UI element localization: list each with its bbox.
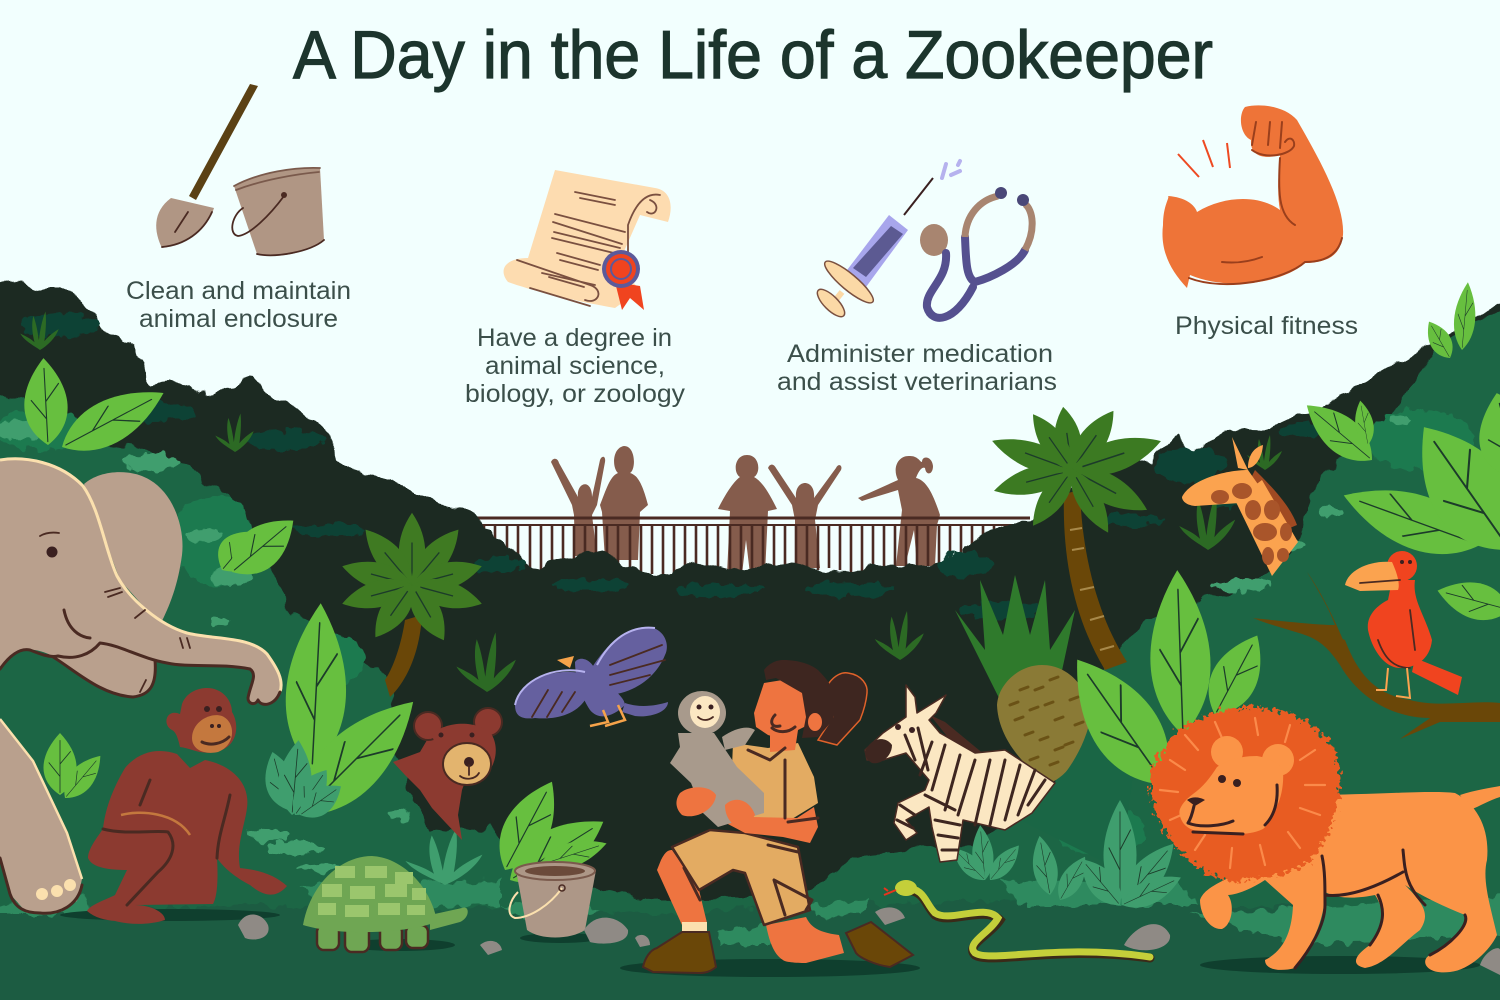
parrot body	[1368, 580, 1432, 668]
parrot	[1345, 551, 1462, 698]
lion face	[1187, 775, 1277, 834]
orangutan head	[166, 688, 236, 753]
dark foliage patches	[20, 313, 1322, 619]
lion body lines	[1295, 850, 1466, 968]
visitor: child waving	[551, 457, 605, 556]
bird legs	[590, 705, 625, 726]
giraffe neck	[1235, 480, 1298, 576]
purple bird	[515, 627, 668, 726]
plant: spiky right behind pod	[955, 575, 1075, 700]
caption: medication	[777, 340, 1057, 396]
hill overlap near pod	[1020, 712, 1135, 870]
lion ears	[1211, 736, 1294, 776]
bridge railing	[475, 518, 1030, 576]
zookeeper with sloth	[643, 660, 913, 973]
bear body	[393, 735, 480, 840]
caption: clean	[126, 277, 351, 333]
zebra stripes	[897, 728, 1045, 850]
icon: flexed arm	[1162, 105, 1343, 288]
sloth face	[678, 691, 726, 735]
ground	[0, 900, 1500, 1000]
parrot beak	[1345, 562, 1399, 591]
snake	[884, 880, 1150, 958]
elephant leg	[0, 719, 82, 913]
lion	[1150, 707, 1500, 972]
plants: teal right	[947, 800, 1186, 916]
zebra mane	[930, 715, 985, 765]
bear	[393, 708, 502, 840]
icon: diploma scroll	[504, 170, 671, 310]
parrot tail	[1412, 658, 1462, 695]
keeper ear	[808, 713, 822, 731]
bear ears	[414, 708, 502, 740]
rocks	[238, 907, 1500, 975]
giraffe	[1182, 437, 1298, 576]
seed pod	[997, 665, 1092, 783]
zebra muzzle	[865, 739, 892, 763]
parrot head	[1387, 551, 1417, 581]
leaves: top right	[1295, 281, 1500, 627]
lion mane strokes	[1160, 718, 1325, 868]
title: A Day in the Life of a Zookeeper	[293, 17, 1213, 93]
tortoise shell plates	[318, 866, 426, 917]
elephant contours	[0, 459, 281, 704]
visitor: child waving 2	[768, 465, 841, 568]
orangutan	[87, 688, 287, 924]
keeper shorts	[672, 830, 810, 925]
keeper forearm	[722, 800, 818, 843]
ground patches	[0, 880, 1500, 945]
orangutan muzzle	[192, 715, 232, 753]
elephant head and trunk	[0, 459, 281, 704]
palm tree: right	[988, 403, 1166, 670]
bird feather lines	[532, 645, 665, 717]
parrot legs and lines	[1360, 560, 1415, 698]
keeper neck	[770, 730, 798, 752]
bird highlights	[515, 628, 655, 705]
visitors on bridge	[551, 446, 940, 574]
leaves: top left	[22, 357, 307, 806]
bear muzzle	[443, 743, 491, 785]
caption: medication: and assist veterinarians	[777, 368, 1057, 396]
bear face	[438, 732, 479, 779]
zebra eyes	[895, 724, 915, 733]
bird body	[575, 659, 625, 716]
orangutan lines	[103, 706, 230, 905]
hill highlights: teal foliage	[0, 415, 1410, 873]
keeper detail lines	[684, 715, 818, 915]
keeper hair	[764, 660, 837, 738]
elephant ear	[84, 472, 183, 625]
ground shadows	[60, 909, 1480, 977]
tortoise head and neck	[430, 908, 468, 930]
bird beak	[557, 656, 574, 668]
bear head	[432, 724, 496, 780]
visitor: adult	[600, 446, 648, 560]
giraffe spots	[1211, 483, 1292, 565]
caption: fitness: Physical fitness	[1175, 312, 1358, 340]
leaves: big left	[279, 602, 434, 836]
keeper sock	[682, 922, 707, 932]
caption: clean: animal enclosure	[139, 305, 338, 333]
lion head	[1179, 756, 1283, 834]
tortoise	[303, 856, 468, 952]
lion body	[1200, 792, 1497, 972]
hill: right	[640, 295, 1500, 1000]
keeper rear boot	[846, 922, 913, 967]
lion mane	[1150, 707, 1340, 882]
sloth arm	[722, 728, 755, 750]
keeper front boot	[643, 932, 716, 973]
caption: degree: Have a degree in	[477, 324, 672, 352]
keeper front leg	[657, 850, 707, 925]
keeper hands	[676, 787, 755, 830]
elephant jaw	[50, 640, 155, 697]
icon: syringe and stethoscope	[813, 161, 1032, 321]
keeper rear leg	[766, 917, 844, 963]
visitor: adult arms on rail	[718, 455, 777, 574]
leaves: behind bucket	[485, 771, 615, 899]
caption: degree: biology, or zoology	[465, 380, 686, 408]
tufts: dark background plants	[20, 312, 1282, 692]
jungle dark backdrop	[0, 280, 1500, 1000]
lion tail	[1460, 786, 1500, 810]
branch	[1253, 572, 1500, 739]
zebra body	[865, 685, 1055, 862]
zebra	[865, 685, 1055, 862]
caption: clean: Clean and maintain	[126, 277, 351, 305]
caption: medication: Administer medication	[787, 340, 1053, 368]
caption: degree: animal science,	[485, 352, 665, 380]
giraffe horns	[1232, 437, 1263, 470]
hill: left	[0, 395, 640, 1000]
giraffe mane	[1250, 470, 1297, 530]
tortoise shell	[303, 856, 437, 932]
visitor: pointing ponytail girl	[858, 456, 940, 566]
bucket on ground	[509, 862, 596, 938]
elephant	[0, 459, 281, 913]
icon: shovel and bucket	[156, 84, 324, 256]
leaves: big right	[1050, 569, 1277, 804]
orangutan body	[87, 751, 287, 924]
caption: degree	[465, 324, 686, 408]
keeper head	[754, 678, 818, 742]
keeper shirt	[730, 743, 818, 822]
keeper ponytail	[818, 673, 867, 745]
bird wings and tail	[515, 627, 668, 718]
hill shading	[0, 410, 1475, 855]
tortoise legs	[317, 925, 428, 952]
giraffe head	[1182, 470, 1262, 506]
palm tree: left	[339, 513, 485, 697]
sloth body	[670, 733, 764, 827]
plants: teal left	[258, 739, 482, 885]
